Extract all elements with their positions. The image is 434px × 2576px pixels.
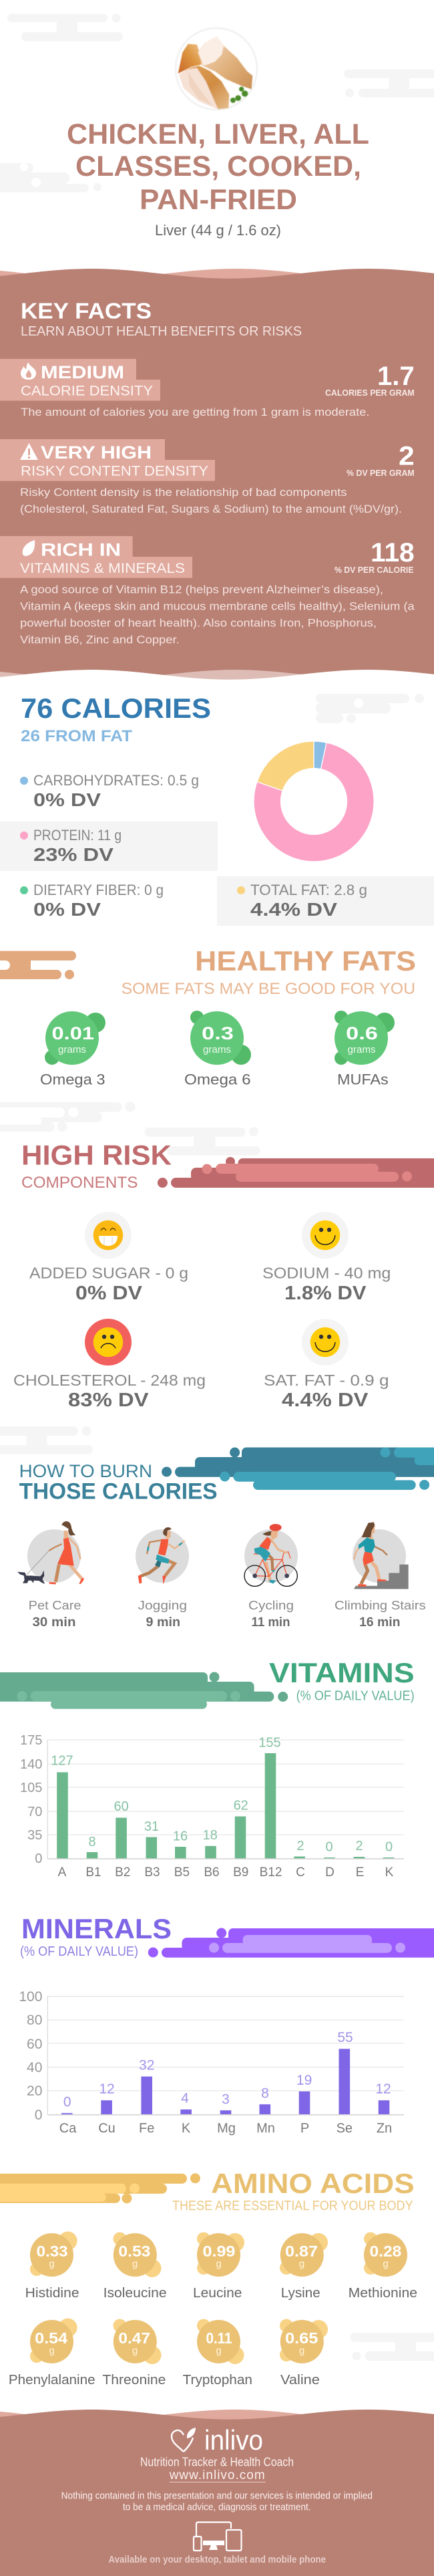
amino: isoleucine: Isoleucine (103, 2286, 167, 2301)
amino: methionine: 0.28 (370, 2242, 401, 2260)
amino: isoleucine: g (132, 2259, 138, 2270)
decorative banner: high risk (158, 1157, 434, 1188)
bar chart: vitamins: B6 (204, 1865, 220, 1880)
icon: sad emoji (93, 1327, 123, 1357)
item: cholesterol: 83% DV (68, 1390, 149, 1411)
fact: calorie density (0, 359, 415, 418)
amino: isoleucine: 0.53 (118, 2242, 150, 2260)
activity: cycling (244, 1524, 298, 1630)
amino: leucine: Leucine (193, 2286, 242, 2301)
bar chart: minerals: Cu (98, 2121, 116, 2136)
bar chart: minerals: 4 (181, 2091, 189, 2106)
bar chart: vitamins: C (296, 1865, 305, 1880)
decorative clouds: burn (0, 1426, 93, 1454)
amino: tryptophan: Tryptophan (183, 2373, 252, 2388)
panel: key facts (0, 269, 434, 688)
title: PAN-FRIED (140, 184, 297, 216)
legend: protein: PROTEIN: 11 g (33, 827, 122, 844)
amino: threonine (102, 2319, 166, 2388)
heading: vitamins: VITAMINS (269, 1657, 415, 1688)
icon: cyclist (244, 1524, 297, 1586)
amino: methionine (349, 2232, 417, 2301)
bar chart: minerals: P (300, 2121, 309, 2136)
bar chart: vitamins: 0 (385, 1840, 393, 1855)
legend: dietary fiber (20, 882, 164, 920)
activity: cycling: 11 min (251, 1616, 290, 1630)
amino: leucine: g (216, 2259, 222, 2270)
fact: calorie density: 1.7 (377, 362, 415, 391)
badge: mufas: grams (347, 1044, 375, 1055)
bar chart: vitamins: K (385, 1865, 394, 1880)
bar chart: minerals: Ca (59, 2121, 77, 2136)
legend: total fat: 4.4% DV (250, 899, 337, 920)
bar chart: vitamins: B1 (85, 1865, 101, 1880)
heading: amino acids: AMINO ACIDS (211, 2168, 415, 2199)
legend: carbohydrates (20, 772, 199, 810)
amino: tryptophan: 0.11 (206, 2329, 232, 2347)
bar chart: vitamins: B9 (233, 1865, 248, 1880)
subheading: 26 from fat: 26 FROM FAT (21, 727, 132, 745)
fact: risky content density: % DV PER GRAM (347, 468, 415, 478)
decorative banner: healthy fats (0, 951, 76, 979)
amino: valine: 0.65 (285, 2329, 318, 2347)
bar chart: minerals (19, 1989, 404, 2136)
bar chart: vitamins: 155 (258, 1735, 281, 1750)
fact: vitamins and minerals: 118 (371, 538, 415, 567)
bar chart: vitamins: 18 (203, 1828, 218, 1843)
bar chart: vitamins: 127 (51, 1753, 73, 1768)
fact: risky content density: (Cholesterol, Saturated Fat, Sugars & Sodium) to the amount (%DV/gr). (20, 503, 402, 515)
bar chart: minerals: 0 (63, 2095, 71, 2110)
bar chart: vitamins: B3 (144, 1865, 160, 1880)
bar chart: vitamins (20, 1733, 404, 1880)
title: CHICKEN, LIVER, ALL (67, 118, 369, 150)
donut chart: macronutrient split (254, 741, 374, 862)
amino: phenylalanine: g (49, 2345, 55, 2357)
bar chart: vitamins: 0 (35, 1851, 42, 1866)
amino: phenylalanine (9, 2318, 95, 2388)
subheading: minerals: (% OF DAILY VALUE) (20, 1944, 138, 1959)
amino: tryptophan: g (216, 2345, 222, 2357)
bar chart: vitamins: 70 (27, 1805, 42, 1819)
activity: pet care: 30 min (32, 1616, 76, 1630)
decorative clouds: amino acids (350, 2333, 434, 2361)
bar chart: minerals: 40 (27, 2060, 42, 2075)
disclaimer: Nothing contained in this presentation and our services is intended or implied (61, 2490, 373, 2502)
bar chart: vitamins: B5 (174, 1865, 190, 1880)
badge: omega 6 (184, 1011, 251, 1088)
item: sodium: 1.8% DV (284, 1283, 367, 1304)
amino: phenylalanine: Phenylalanine (9, 2373, 95, 2388)
activity: jogging (136, 1527, 189, 1630)
amino: threonine: Threonine (102, 2373, 166, 2388)
bar chart: minerals: 19 (296, 2073, 312, 2088)
heading: how to burn: HOW TO BURN (19, 1461, 152, 1481)
panel: vitamins (0, 1657, 415, 1880)
legend: dietary fiber: DIETARY FIBER: 0 g (33, 882, 164, 898)
bar chart: vitamins: 105 (20, 1781, 42, 1795)
item: added sugar: 0% DV (75, 1283, 143, 1304)
bar chart: minerals: 80 (27, 2013, 42, 2028)
amino: methionine: Methionine (349, 2286, 417, 2301)
decorative clouds: calories (316, 694, 424, 723)
legend: carbohydrates: 0% DV (33, 789, 101, 810)
icon: inlivo heart logo (172, 2428, 196, 2452)
amino: leucine: 0.99 (203, 2242, 235, 2260)
item: cholesterol (13, 1319, 206, 1411)
fact: calorie density: CALORIE DENSITY (21, 384, 153, 398)
heading: 76 calories: 76 CALORIES (21, 692, 211, 724)
legend: dietary fiber: 0% DV (33, 899, 101, 920)
panel: calories (0, 692, 434, 926)
subheading: amino acids: THESE ARE ESSENTIAL FOR YOUR BODY (172, 2198, 413, 2213)
badge: omega 3: Omega 3 (40, 1071, 105, 1088)
heading: high risk: HIGH RISK (21, 1140, 172, 1171)
decorative banner: minerals (148, 1928, 434, 1958)
badge: omega 3 (40, 1011, 105, 1088)
disclaimer (61, 2490, 373, 2513)
activity: pet care (17, 1521, 84, 1630)
bar chart: minerals: 3 (222, 2091, 230, 2107)
amino: valine (280, 2319, 328, 2388)
heading: healthy fats: HEALTHY FATS (195, 945, 416, 977)
amino: lysine: Lysine (281, 2286, 320, 2301)
legend: carbohydrates: CARBOHYDRATES: 0.5 g (33, 772, 199, 789)
amino: threonine: g (132, 2345, 138, 2357)
fact: calorie density: The amount of calories you are getting from 1 gram is moderate. (21, 406, 370, 418)
bar chart: minerals: 20 (27, 2083, 42, 2099)
decorative clouds: high risk (0, 1102, 260, 1156)
tagline: Nutrition Tracker & Health Coach (140, 2456, 294, 2469)
heading: minerals: MINERALS (21, 1913, 172, 1944)
item: saturated fat: SAT. FAT - 0.9 g (264, 1372, 389, 1389)
panel: high risk components (13, 1140, 434, 1411)
bar chart: minerals: Zn (377, 2121, 392, 2136)
logo wordmark: inlivo (204, 2424, 263, 2456)
bar chart: minerals: 0 (35, 2107, 42, 2123)
activity: jogging: Jogging (138, 1599, 187, 1612)
panel: how to burn those calories (17, 1448, 434, 1630)
bar chart: minerals: Se (337, 2121, 353, 2136)
bar chart: minerals: 12 (375, 2081, 391, 2097)
bar chart: minerals: 60 (27, 2037, 42, 2052)
fact: risky content density: 2 (399, 441, 415, 471)
badge: mufas: MUFAs (337, 1071, 389, 1088)
decorative header clouds (0, 13, 434, 192)
amino: leucine (193, 2232, 244, 2301)
icon: runner (138, 1527, 185, 1585)
heading: key facts: KEY FACTS (21, 299, 152, 324)
bar chart: vitamins: E (356, 1865, 364, 1880)
badge: omega 3: grams (58, 1044, 86, 1055)
item: sodium (262, 1212, 391, 1304)
title: CLASSES, COOKED, (75, 150, 361, 182)
panel: minerals (19, 1913, 434, 2136)
legend: protein (0, 821, 218, 871)
bar chart: vitamins: 0 (325, 1840, 333, 1855)
bar chart: vitamins: 2 (355, 1839, 363, 1853)
icon: grinning emoji (93, 1220, 123, 1250)
item: saturated fat (264, 1319, 389, 1411)
badge: omega 6: Omega 6 (184, 1071, 251, 1088)
bar chart: vitamins: 60 (114, 1799, 129, 1814)
bar chart: minerals: 100 (19, 1989, 42, 2005)
legend: total fat (217, 876, 434, 926)
amino: phenylalanine: 0.54 (35, 2329, 67, 2347)
badge: omega 6: grams (203, 1044, 231, 1055)
fact: vitamins and minerals: VITAMINS & MINERALS (20, 561, 185, 576)
subheading: components: COMPONENTS (21, 1174, 138, 1192)
panel: healthy fats (0, 945, 416, 1088)
amino: histidine: Histidine (25, 2286, 79, 2301)
subheading: vitamins: (% OF DAILY VALUE) (296, 1689, 415, 1704)
subheading: key facts: LEARN ABOUT HEALTH BENEFITS OR RISKS (21, 324, 302, 339)
decorative banner: burn (162, 1448, 434, 1490)
decorative banner: vitamins (0, 1672, 288, 1709)
legend: protein: 23% DV (33, 844, 114, 865)
icon: woman climbing stairs (354, 1522, 409, 1589)
fact: vitamins and minerals: Vitamin A (keeps skin and mucous membrane cells healthy), Selenium (a (20, 600, 415, 612)
panel: footer (0, 2410, 434, 2576)
fact: vitamins and minerals: powerful booster of heart health). Also contains Iron, Phosphorus, (20, 616, 377, 629)
bar chart: minerals: 55 (337, 2030, 353, 2045)
activity: pet care: Pet Care (29, 1599, 81, 1612)
fact: vitamins and minerals: Vitamin B6, Zinc and Copper. (20, 633, 180, 646)
decorative banner: amino acids (0, 2174, 200, 2203)
disclaimer: to be a medical advice, diagnosis or treatment. (123, 2501, 311, 2513)
bar chart: vitamins: B2 (115, 1865, 130, 1880)
amino: isoleucine (103, 2232, 167, 2301)
bar chart: vitamins: A (58, 1865, 67, 1880)
amino: methionine: g (383, 2259, 389, 2270)
bar chart: vitamins: 31 (144, 1819, 159, 1834)
item: cholesterol: CHOLESTEROL - 248 mg (13, 1372, 206, 1389)
activity: climbing stairs: 16 min (359, 1616, 401, 1630)
bar chart: minerals: K (182, 2121, 191, 2136)
amino: lysine: g (299, 2259, 304, 2270)
amino: valine: g (299, 2345, 304, 2357)
bar chart: vitamins: 16 (173, 1829, 188, 1843)
bar chart: vitamins: D (325, 1865, 335, 1880)
bar chart: minerals: 12 (99, 2081, 115, 2097)
icon: woman walking dog (17, 1521, 84, 1584)
legend: total fat: TOTAL FAT: 2.8 g (250, 882, 367, 898)
heading: those calories: THOSE CALORIES (19, 1479, 218, 1505)
amino: valine: Valine (280, 2373, 320, 2388)
amino: threonine: 0.47 (118, 2329, 150, 2347)
bar chart: vitamins: 175 (20, 1733, 42, 1748)
bar chart: vitamins: 62 (234, 1799, 248, 1813)
activity: climbing stairs (335, 1522, 426, 1630)
food photo: chicken liver (176, 28, 257, 110)
fact: risky content density: Risky Content density is the relationship of bad components (20, 486, 347, 499)
title (67, 118, 369, 216)
fact: vitamins and minerals: RICH IN (41, 539, 121, 559)
fact: risky content density: RISKY CONTENT DENSITY (21, 464, 208, 479)
activity: jogging: 9 min (146, 1616, 180, 1630)
activity: cycling: Cycling (248, 1599, 294, 1612)
bar chart: minerals: Mg (217, 2121, 236, 2136)
icon: smiling emoji (310, 1327, 340, 1357)
item: added sugar: ADDED SUGAR - 0 g (29, 1265, 188, 1282)
bar chart: minerals: Mn (256, 2121, 275, 2136)
amino: tryptophan (183, 2319, 252, 2388)
amino: lysine: 0.87 (285, 2242, 318, 2260)
item: saturated fat: 4.4% DV (282, 1390, 369, 1411)
bar chart: vitamins: 8 (88, 1835, 96, 1849)
fact: vitamins and minerals: % DV PER CALORIE (335, 565, 414, 575)
availability note: Available on your desktop, tablet and mobile phone (108, 2554, 326, 2565)
bar chart: minerals: 32 (139, 2058, 154, 2073)
fact: risky content density (0, 439, 415, 515)
panel: amino acids (0, 2168, 417, 2388)
badge: omega 6: 0.3 (202, 1023, 234, 1043)
icon: warning triangle (20, 443, 38, 460)
icon: leaf (23, 540, 35, 556)
bar chart: minerals: Fe (139, 2121, 154, 2136)
subheading: healthy fats: SOME FATS MAY BE GOOD FOR YOU (122, 980, 415, 998)
fact: calorie density: CALORIES PER GRAM (325, 388, 415, 398)
fact: vitamins and minerals (0, 536, 415, 646)
icon: desktop, tablet and phone (194, 2523, 242, 2551)
bar chart: vitamins: 2 (296, 1839, 304, 1853)
badge: mufas (335, 1011, 395, 1088)
activity: climbing stairs: Climbing Stairs (335, 1599, 426, 1612)
badge: omega 3: 0.01 (52, 1023, 94, 1043)
bar chart: minerals: 8 (261, 2085, 269, 2101)
amino: histidine (25, 2231, 79, 2301)
fact: vitamins and minerals: A good source of Vitamin B12 (helps prevent Alzheimer’s disease), (20, 584, 383, 596)
serving size: Liver (44 g / 1.6 oz) (155, 222, 281, 239)
bar chart: vitamins: 35 (27, 1828, 42, 1843)
bar chart: vitamins: B12 (260, 1865, 282, 1880)
amino: histidine: g (49, 2259, 55, 2270)
fact: calorie density: MEDIUM (41, 362, 124, 382)
item: added sugar (29, 1212, 188, 1304)
badge: mufas: 0.6 (346, 1023, 378, 1043)
bar chart: vitamins: 140 (20, 1757, 42, 1772)
website link: www.inlivo.com (169, 2468, 265, 2482)
icon: smiling emoji (310, 1220, 340, 1250)
amino: histidine: 0.33 (37, 2242, 68, 2260)
icon: flame (21, 362, 36, 380)
item: sodium: SODIUM - 40 mg (262, 1265, 391, 1282)
amino: lysine (280, 2233, 328, 2301)
fact: risky content density: VERY HIGH (41, 442, 152, 463)
